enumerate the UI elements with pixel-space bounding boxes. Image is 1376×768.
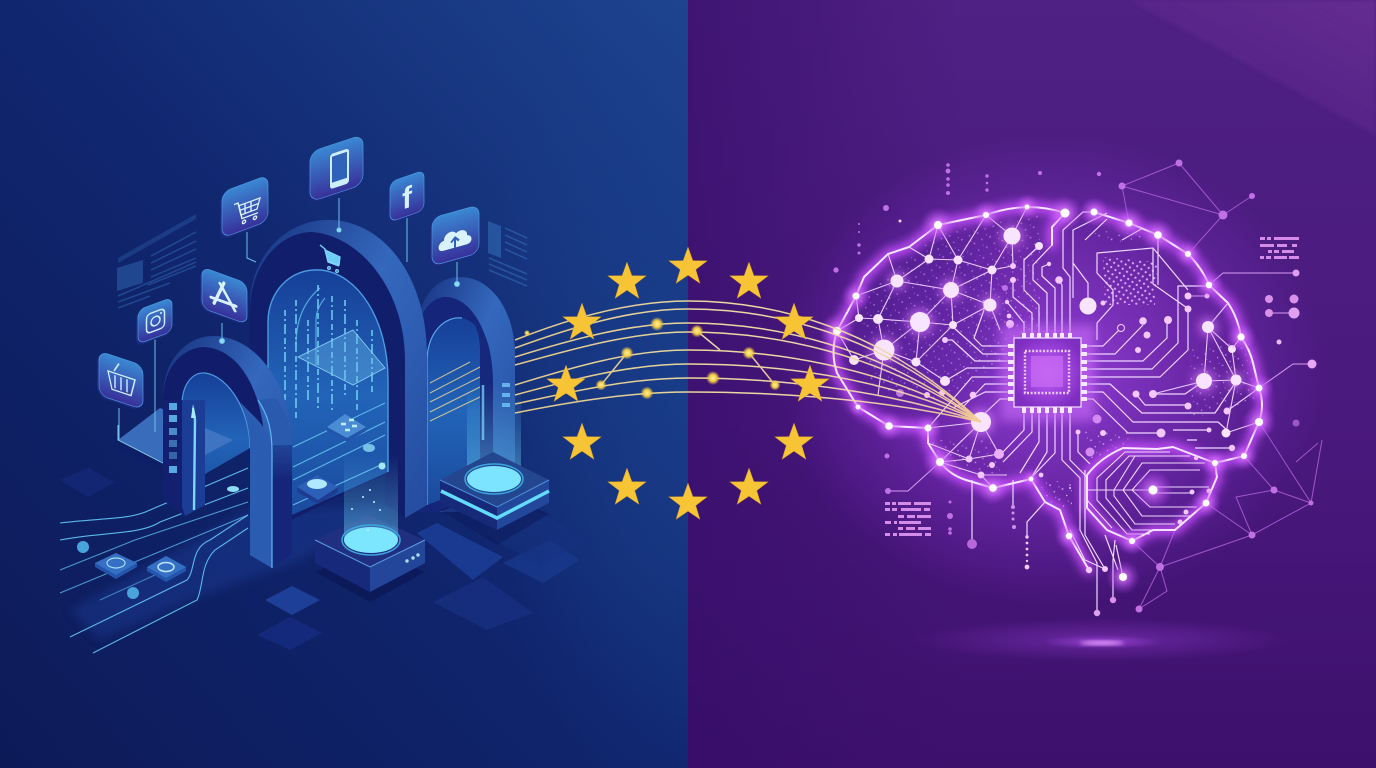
brain: speckle textures bbox=[860, 215, 1255, 510]
icon tile: cloud upload bbox=[430, 205, 479, 269]
data wires crossing the floor bbox=[60, 403, 385, 653]
pod: back right bbox=[440, 452, 549, 545]
floating data chips bbox=[77, 414, 386, 599]
icon tile: Facebook: f bbox=[402, 179, 413, 217]
brain: small circuit nodes bbox=[896, 262, 1235, 616]
holographic text panel, left bbox=[117, 214, 196, 308]
right arch light beam and rod bbox=[467, 383, 521, 480]
isometric floor tiles bbox=[60, 468, 590, 650]
data bars, lower left of brain bbox=[885, 502, 931, 536]
pod: front centre bbox=[315, 455, 425, 602]
golden data wires linking both sides bbox=[515, 301, 981, 422]
brain: circuit traces from chip bbox=[928, 212, 1237, 613]
brain: large neural nodes bbox=[849, 228, 1242, 438]
ring of twelve EU stars bbox=[547, 247, 829, 519]
icon tile: Instagram camera bbox=[136, 297, 172, 347]
icon tile: Facebook bbox=[388, 170, 424, 225]
background: blue left half bbox=[0, 0, 688, 768]
icon tile: shopping basket bbox=[97, 350, 143, 412]
central microchip bbox=[1000, 325, 1095, 421]
background: purple right half bbox=[688, 0, 1376, 768]
chip pins bbox=[1008, 333, 1087, 413]
brain: soft glow backdrop bbox=[775, 135, 1325, 605]
translucent data plate bbox=[298, 330, 385, 385]
right arch gateway bbox=[417, 277, 515, 512]
icon tile: smartphone bbox=[308, 135, 363, 205]
data bars, right of brain bbox=[1260, 237, 1299, 259]
brain: neural network edges bbox=[837, 207, 1259, 488]
glow on floor beneath brain bbox=[912, 618, 1292, 662]
left small arch gateway bbox=[163, 336, 292, 568]
brain: large neural node halos bbox=[871, 225, 1244, 435]
brain: dim external constellation network bbox=[1122, 163, 1322, 609]
arch data lines bbox=[430, 362, 480, 421]
small platform behind left arch bbox=[118, 408, 233, 472]
holographic text panel, right bbox=[488, 221, 527, 286]
central large arch gateway bbox=[250, 220, 427, 530]
cart glyph on arch bbox=[320, 245, 340, 272]
icon tile: app store bbox=[200, 266, 247, 326]
golden network nodes bbox=[524, 317, 780, 400]
brain: glowing junction nodes bbox=[819, 194, 1276, 594]
brain: lower lobe concentric circuit bbox=[1087, 452, 1209, 534]
brain outline with glow bbox=[834, 207, 1262, 570]
brain: external callout lines and dots bbox=[833, 160, 1316, 612]
icon tile: shopping cart bbox=[220, 175, 268, 241]
falling data streams bbox=[285, 285, 372, 420]
icon stems bbox=[119, 198, 460, 440]
